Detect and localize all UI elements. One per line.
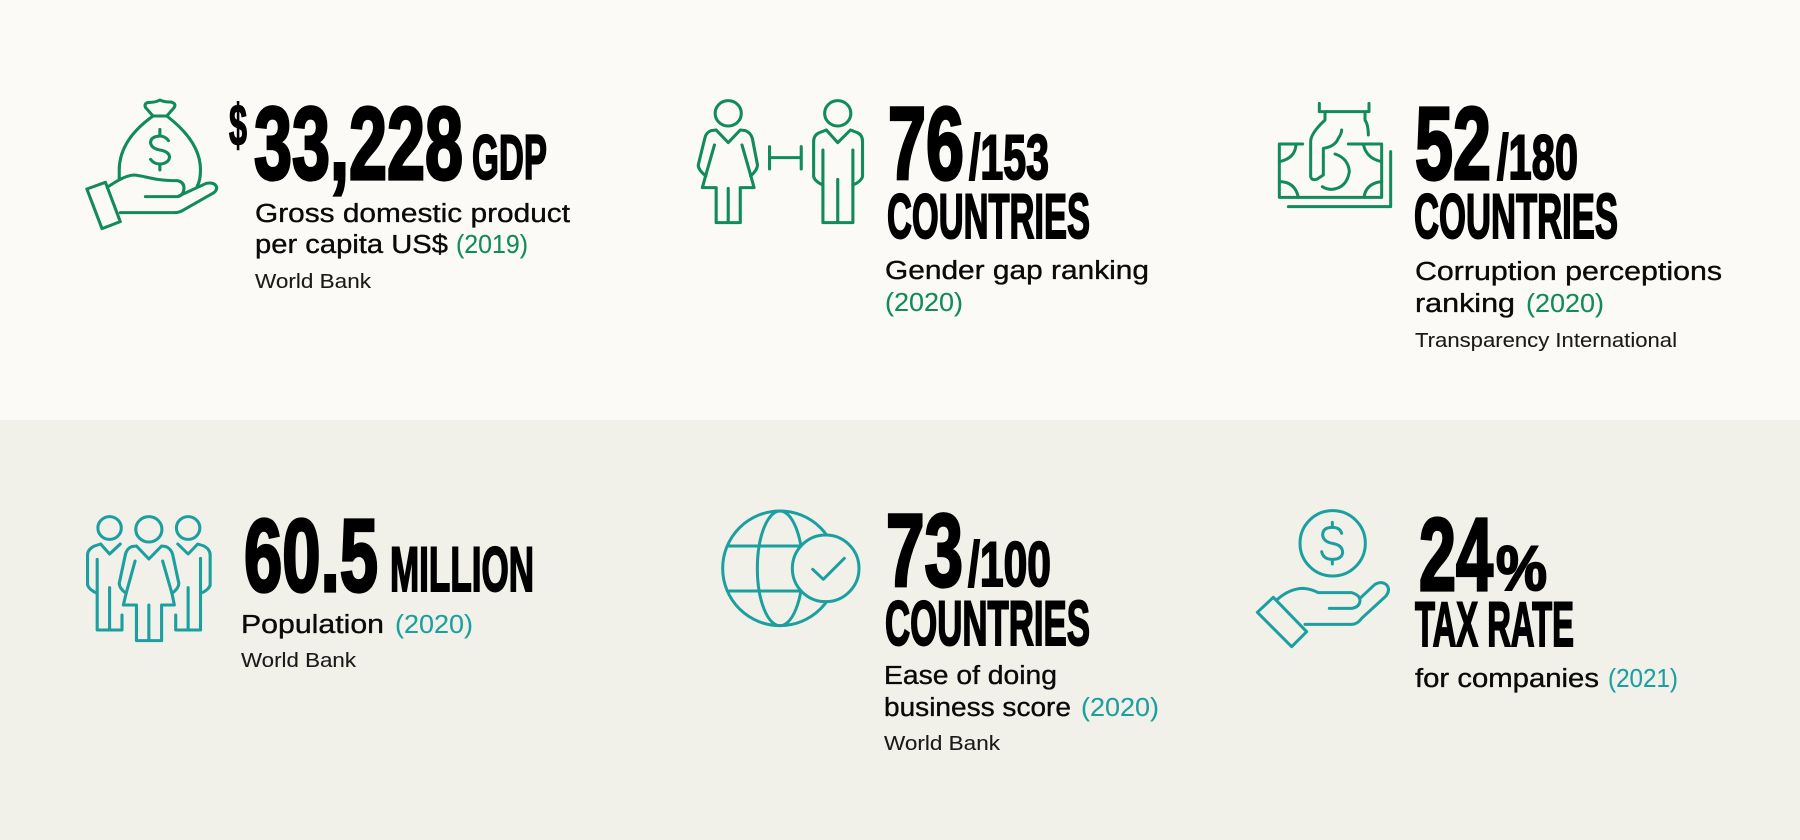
- source: World Bank: World Bank: [255, 271, 372, 293]
- unit: GDP: GDP: [472, 123, 547, 193]
- description: gross domestic product: Gross domestic product: [255, 200, 570, 228]
- panel: top background: [0, 0, 1800, 420]
- panel: tax rate: [1257, 497, 1678, 693]
- figure: 76: 76: [888, 86, 964, 201]
- figure: /100: /100: [968, 530, 1051, 600]
- description: gross domestic product: (2019): [456, 231, 528, 259]
- icon: woman and man with gap: [698, 101, 863, 223]
- description: gross domestic product: per capita US$: [255, 231, 448, 259]
- panel: GDP per capita: [87, 86, 570, 293]
- source: World Bank: World Bank: [884, 733, 1001, 755]
- description: ease of doing business: [884, 662, 1159, 722]
- description: ease of doing business: Ease of doing: [884, 662, 1057, 690]
- figure: 73: 73: [886, 493, 963, 608]
- description: for companies: (2021): [1608, 665, 1678, 693]
- unit: countries: COUNTRIES: [1414, 182, 1618, 252]
- panel: ease of doing business: [723, 493, 1159, 755]
- unit: countries: COUNTRIES: [885, 589, 1090, 659]
- figure: 24: 24: [1419, 497, 1493, 612]
- description: gender gap ranking: Gender gap ranking: [885, 257, 1149, 285]
- description: ease of doing business: business score: [884, 694, 1071, 722]
- description: corruption perceptions: ranking: [1415, 290, 1515, 318]
- panel: corruption perceptions ranking: [1279, 86, 1722, 352]
- source: Transparency International: Transparency International: [1415, 330, 1677, 352]
- figure: percent: %: [1496, 534, 1547, 604]
- icon: globe with check badge: [723, 511, 859, 626]
- description: corruption perceptions: [1415, 258, 1722, 318]
- figure: 33,228: 33,228: [254, 86, 463, 201]
- description: population: (2020): [395, 611, 473, 639]
- description: ease of doing business: (2020): [1081, 694, 1159, 722]
- icon: coin over open hand: [1257, 511, 1389, 647]
- unit: tax rate: TAX RATE: [1415, 590, 1574, 660]
- description: for companies: [1415, 665, 1678, 693]
- figure: 52: 52: [1415, 86, 1491, 201]
- panel: population: [88, 498, 534, 672]
- unit: countries: COUNTRIES: [887, 182, 1090, 252]
- description: for companies: for companies: [1415, 665, 1599, 693]
- figure: 60.5: 60.5: [244, 498, 378, 613]
- description: population: [241, 611, 473, 639]
- icon: three people: [88, 517, 210, 641]
- description: population: Population: [241, 611, 384, 639]
- panel: gender gap ranking: [698, 86, 1149, 317]
- source: World Bank: World Bank: [241, 650, 357, 672]
- dollar sign: $: [229, 93, 247, 158]
- icon: hand taking banknote: [1279, 103, 1391, 207]
- figure: /153: /153: [969, 123, 1049, 193]
- panel: bottom background: [0, 420, 1800, 840]
- icon: money bag on hand: [87, 100, 217, 229]
- description: gender gap ranking: (2020): [885, 289, 963, 317]
- unit: million: MILLION: [390, 535, 534, 605]
- description: corruption perceptions: Corruption perceptions: [1415, 258, 1722, 286]
- description: corruption perceptions: (2020): [1526, 290, 1604, 318]
- figure: /180: /180: [1497, 123, 1578, 193]
- description: gross domestic product: [255, 200, 570, 259]
- description: gender gap ranking: [885, 257, 1149, 317]
